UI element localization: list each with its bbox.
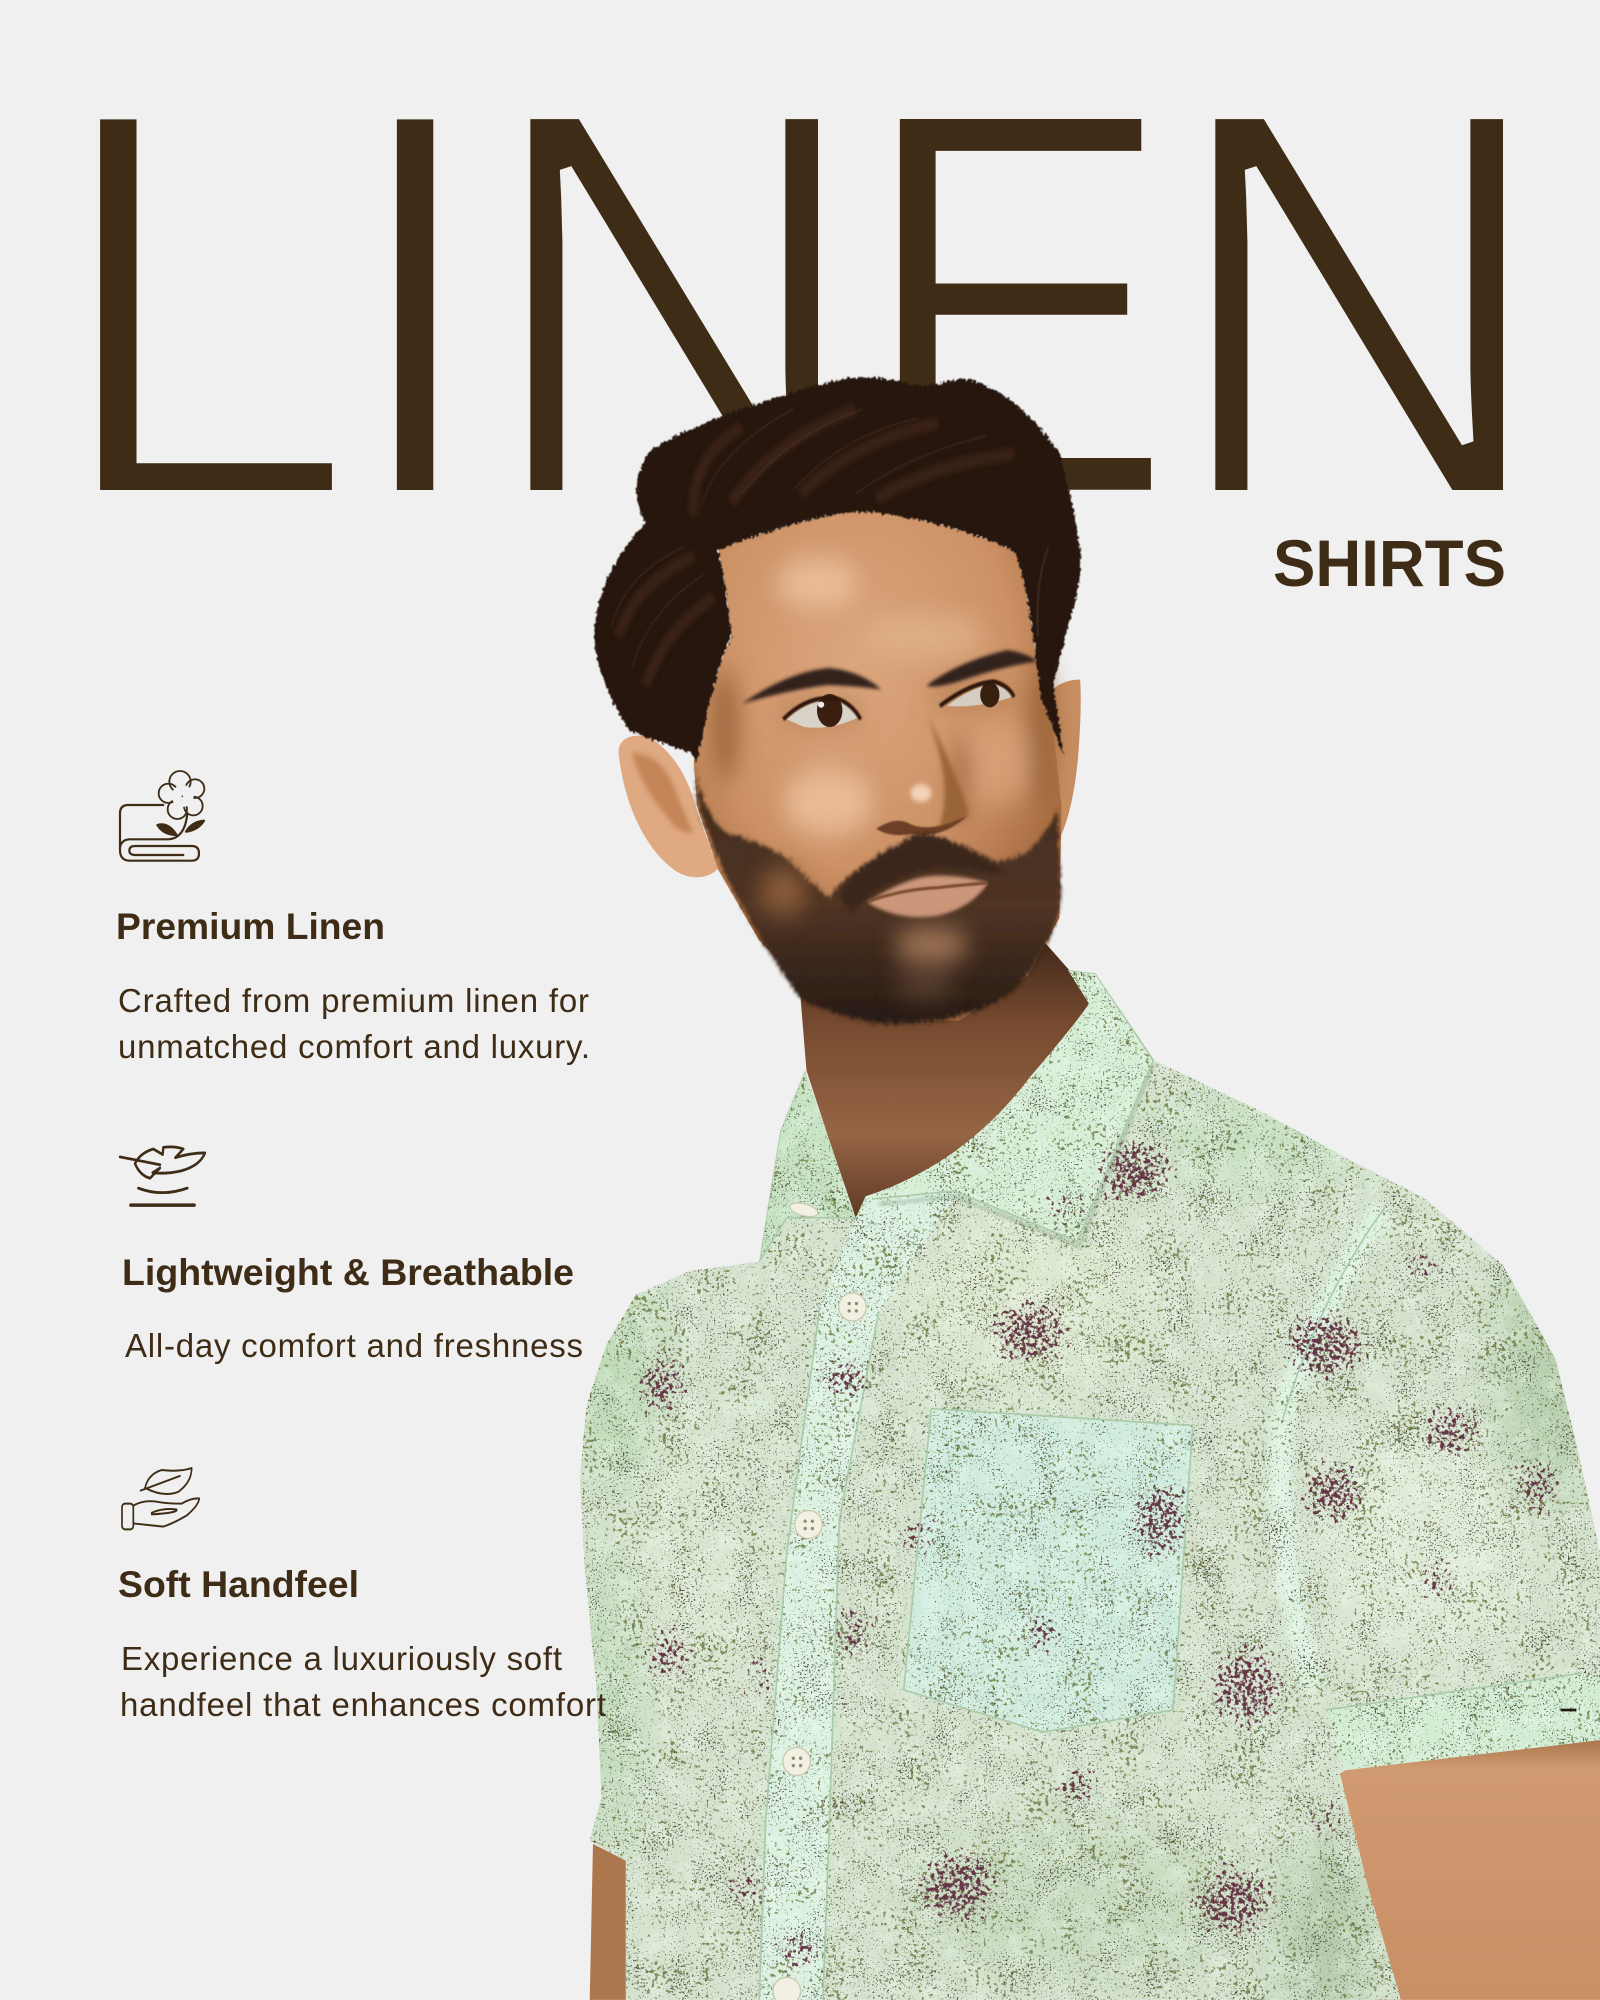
heading: lightweight: Lightweight & Breathable	[122, 1252, 574, 1293]
lip line	[868, 883, 986, 901]
shirt and arms	[570, 937, 1600, 2000]
moustache	[840, 835, 1007, 914]
subtitle: SHIRTS: SHIRTS	[1273, 526, 1506, 600]
hair	[594, 377, 1081, 762]
left eye	[783, 694, 861, 728]
placket	[759, 1191, 958, 2000]
icon: towel with flower	[120, 771, 204, 861]
right arm	[1325, 1737, 1600, 2000]
shirt fabric	[570, 950, 1600, 2000]
title: LINEN: E	[856, 0, 1176, 613]
feature: lightweight	[120, 1147, 583, 1364]
title: LINEN	[46, 0, 1553, 618]
cuff mark	[1561, 1709, 1576, 1711]
right collar	[856, 970, 1153, 1241]
right eye	[940, 681, 1014, 707]
title: LINEN: N	[1165, 0, 1553, 616]
description: soft handfeel: handfeel that enhances comfort	[120, 1686, 606, 1723]
title: LINEN: N	[480, 0, 868, 616]
neck	[800, 937, 1102, 1218]
left forearm	[590, 1844, 626, 2000]
beard highlight	[759, 869, 969, 994]
eyebrows	[742, 650, 1038, 704]
description: premium linen	[118, 982, 590, 1065]
face highlights	[709, 559, 1055, 835]
icon: hand and leaf	[122, 1468, 199, 1529]
title: LINEN: I	[337, 0, 493, 618]
feature: soft handfeel	[118, 1468, 606, 1723]
sleeve seam	[1281, 1208, 1385, 1687]
collar shadow	[879, 1064, 1153, 1246]
face	[694, 510, 1061, 1021]
beard	[694, 762, 1061, 1024]
hair sheen	[618, 409, 1014, 686]
left collar	[759, 1071, 856, 1261]
description: soft handfeel: Experience a luxuriously soft	[121, 1640, 562, 1677]
garment seams	[759, 970, 1582, 2000]
description: lightweight: All-day comfort and freshness	[125, 1327, 583, 1364]
description: premium linen: unmatched comfort and luxury.	[118, 1028, 590, 1065]
icon: feather	[120, 1147, 205, 1205]
sleeve cuff	[1325, 1673, 1600, 1770]
description: premium linen: Crafted from premium linen for	[118, 982, 589, 1019]
lips	[868, 876, 988, 917]
description: soft handfeel	[120, 1640, 606, 1723]
shirt buttons	[773, 1200, 866, 2000]
hair strands	[611, 409, 1048, 668]
head	[594, 377, 1081, 1024]
feature: premium linen	[116, 771, 590, 1065]
heading: soft handfeel: Soft Handfeel	[118, 1564, 359, 1605]
right ear	[1048, 680, 1081, 837]
nose	[876, 717, 969, 835]
pocket	[904, 1409, 1193, 1732]
left ear	[619, 736, 718, 877]
speckle print	[570, 950, 1600, 2000]
title: LINEN: L	[46, 0, 359, 618]
model photo illustration	[570, 377, 1600, 2000]
heading: premium linen: Premium Linen	[116, 906, 385, 947]
